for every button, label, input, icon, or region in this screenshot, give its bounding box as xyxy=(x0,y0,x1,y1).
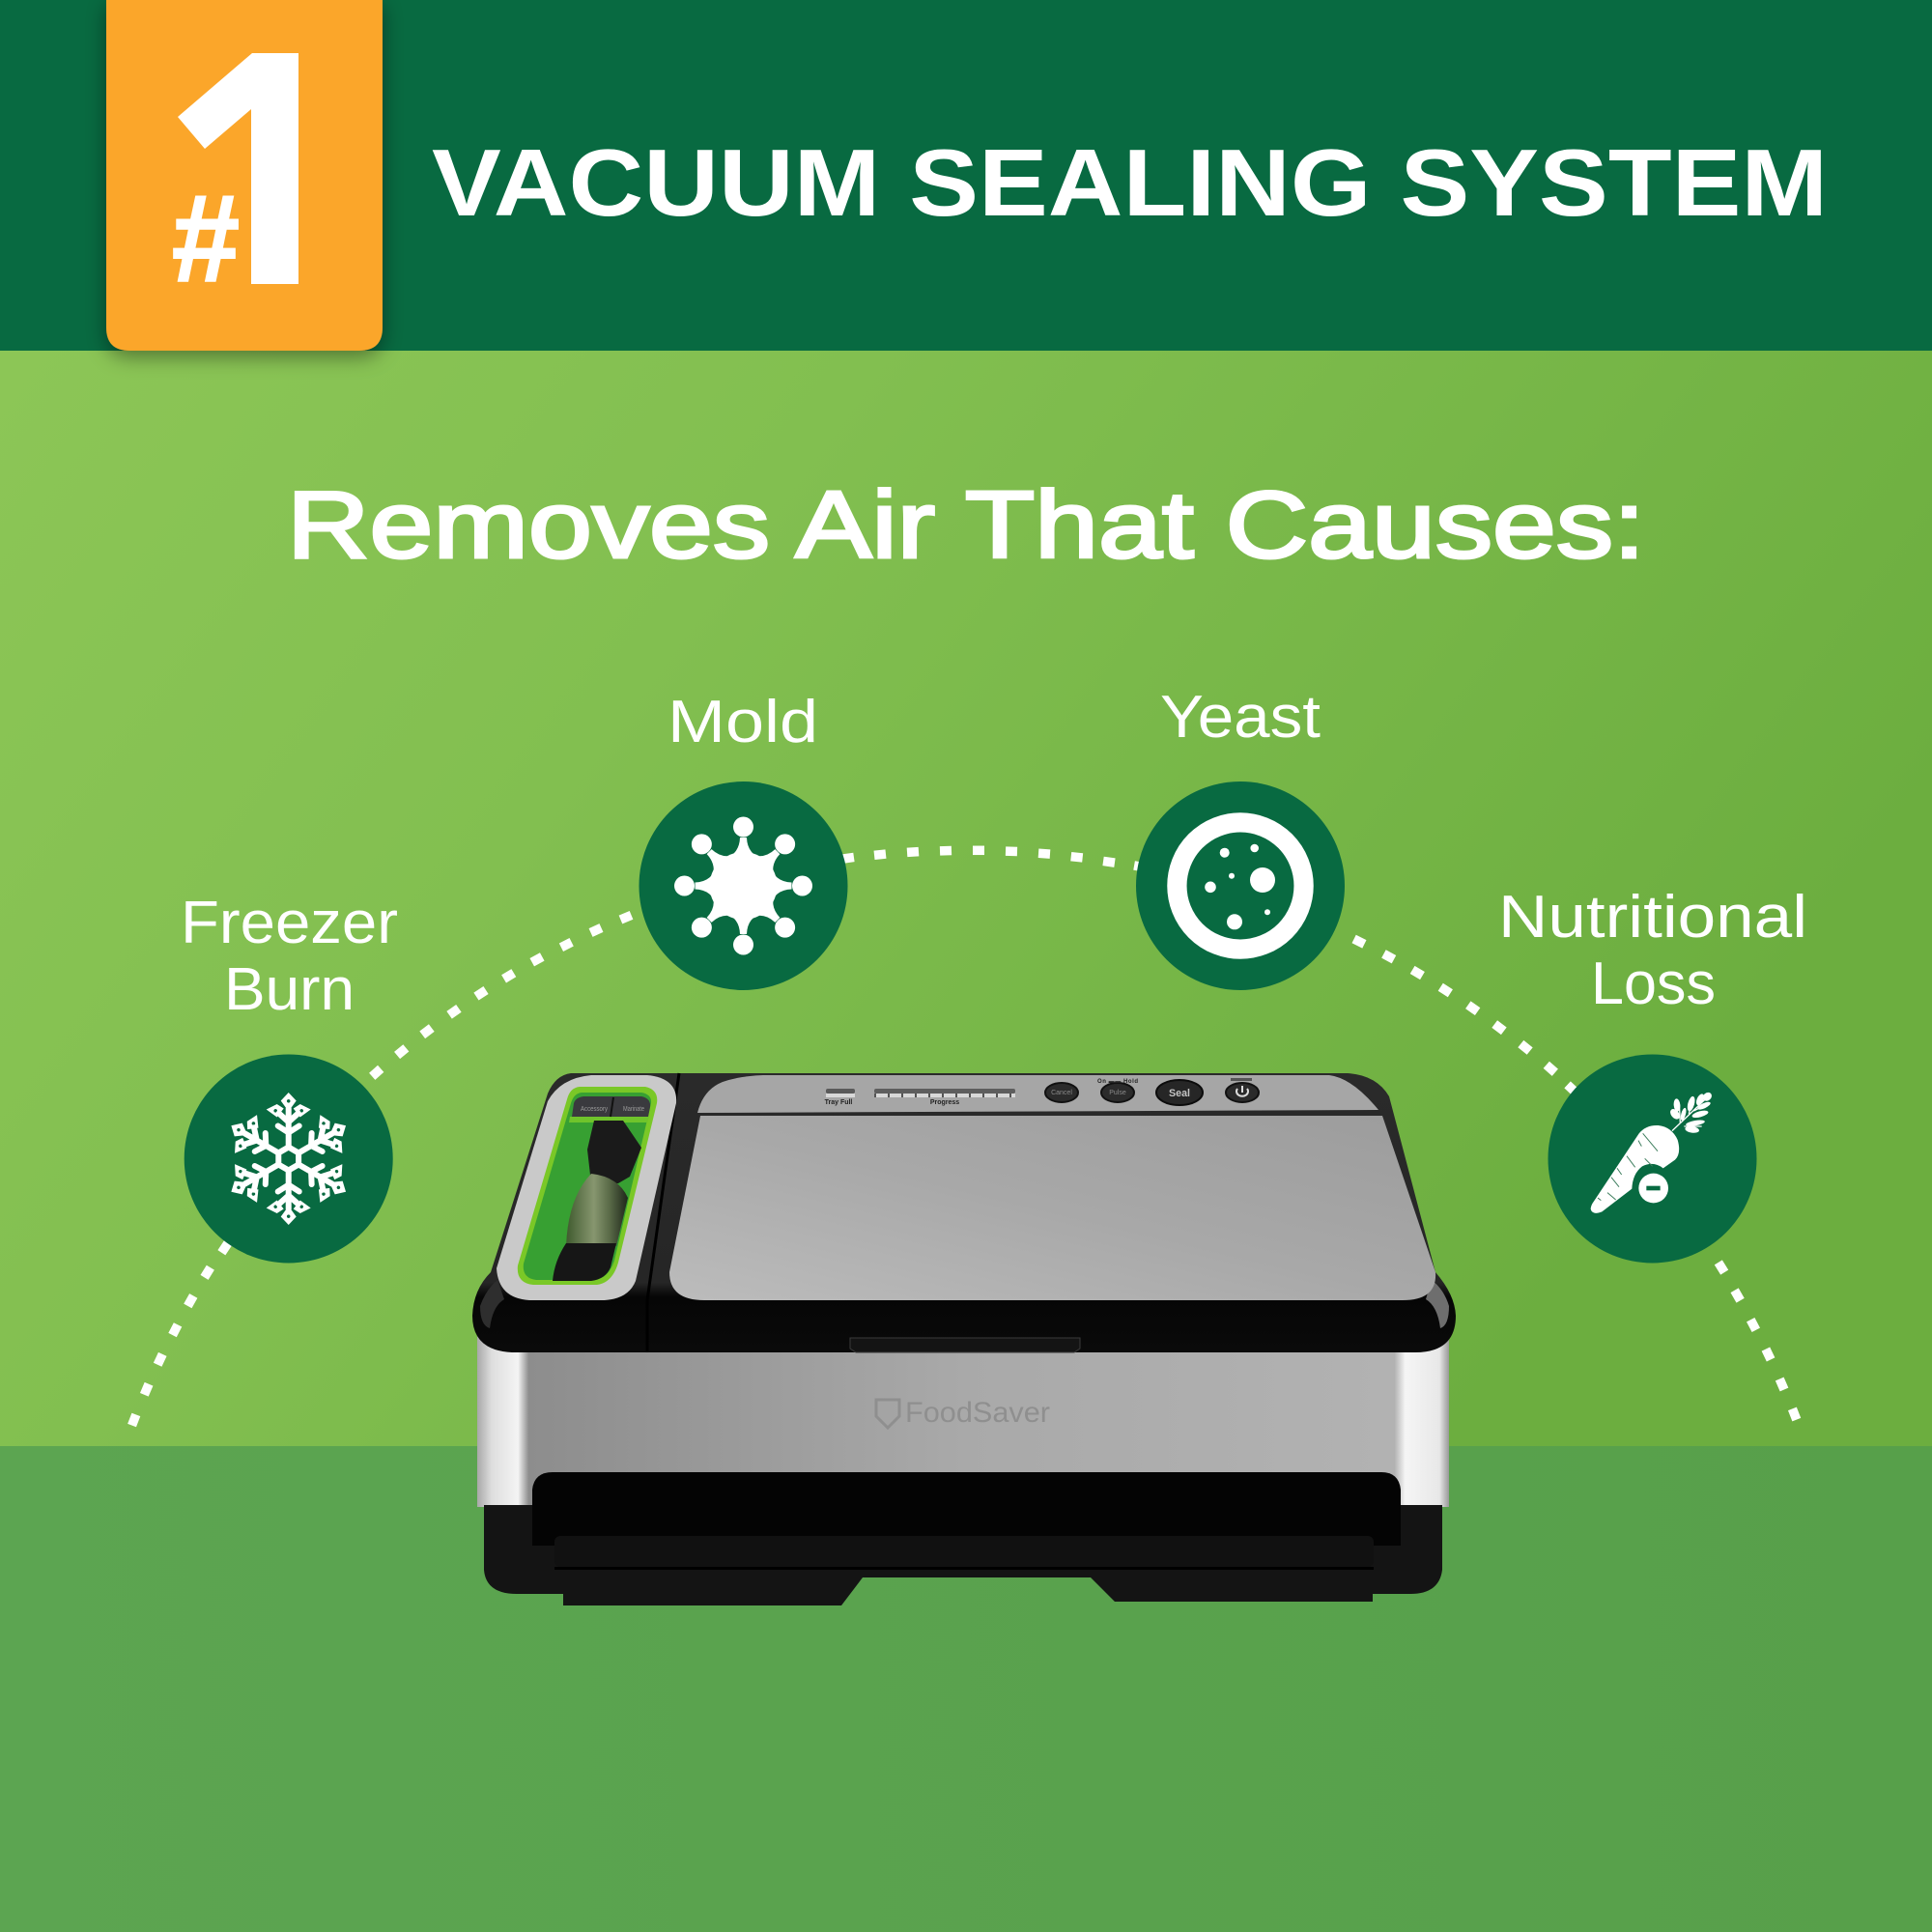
title: VACUUM SEALING SYSTEM xyxy=(432,129,1828,236)
heading: Removes Air That Causes: xyxy=(287,471,1645,578)
label: Yeast: Yeast xyxy=(1160,684,1321,751)
dotted arc xyxy=(128,846,1801,1427)
product: black base with feet xyxy=(484,1505,1442,1605)
product: silver body xyxy=(477,1333,1449,1507)
product: pulse button: Pulse xyxy=(1109,1090,1126,1096)
product: lid xyxy=(472,1073,1456,1352)
product: compartment seam xyxy=(647,1073,679,1352)
label: Freezer Burn: Burn xyxy=(224,956,355,1023)
icon: mold xyxy=(639,781,848,990)
label: Freezer Burn: Freezer xyxy=(181,890,398,956)
product: brand mark: FoodSaver xyxy=(905,1397,1050,1429)
product: cancel button xyxy=(1045,1083,1078,1102)
product: accessory compartment: Marinate xyxy=(623,1106,644,1113)
product: seal button: Seal xyxy=(1169,1088,1190,1099)
label: Nutritional Loss: Loss xyxy=(1591,951,1716,1017)
badge: #1: # xyxy=(172,170,240,308)
product: tray full indicator: Tray Full xyxy=(825,1099,852,1106)
product: control strip xyxy=(697,1075,1378,1113)
icon: snowflake xyxy=(185,1055,393,1264)
badge: #1 xyxy=(106,0,399,355)
product: progress indicator: Progress xyxy=(930,1099,959,1106)
product: progress indicator xyxy=(874,1089,1015,1106)
label: Nutritional Loss xyxy=(1498,884,1807,1017)
label: Nutritional Loss: Nutritional xyxy=(1498,884,1807,951)
icon: carrot with minus xyxy=(1548,1055,1756,1264)
product: lid sheen xyxy=(480,1280,1449,1328)
product: cancel button: Cancel xyxy=(1051,1090,1072,1096)
label: Freezer Burn xyxy=(181,890,398,1023)
product: seal button xyxy=(1156,1080,1203,1105)
product: power button xyxy=(1226,1078,1259,1102)
background: upper green wall xyxy=(0,0,1932,1447)
product: vacuum sealer xyxy=(472,1073,1456,1605)
header band xyxy=(0,0,1932,351)
product: accessory compartment: Accessory xyxy=(581,1106,608,1113)
product: lid handle xyxy=(850,1338,1080,1352)
product: pulse button: On ▬▬ Hold xyxy=(1097,1079,1138,1085)
product: tray full indicator xyxy=(825,1089,855,1106)
background: lower green floor xyxy=(0,1446,1932,1932)
label: Mold: Mold xyxy=(668,689,818,755)
product: pulse button xyxy=(1097,1079,1138,1102)
product: main lid panel xyxy=(669,1116,1435,1300)
product: front slot xyxy=(532,1472,1401,1570)
product: accessory compartment xyxy=(497,1075,676,1300)
icon: yeast xyxy=(1136,781,1345,990)
